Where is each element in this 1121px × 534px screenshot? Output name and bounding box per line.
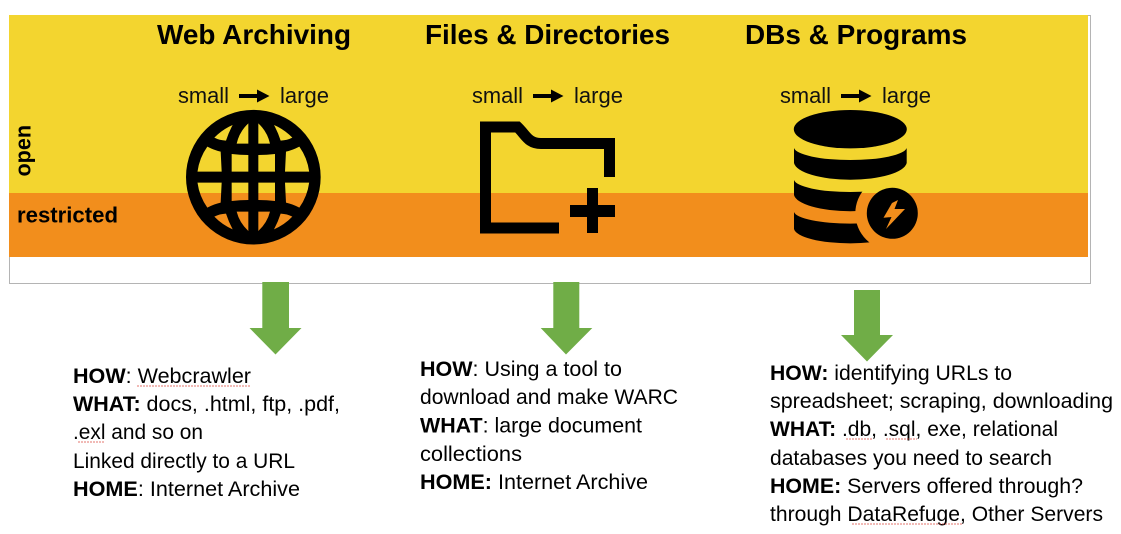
scale: small to large, databases: small xyxy=(780,83,831,108)
scale: small to large, databases xyxy=(780,83,931,108)
text block: web archiving notes: HOME: Internet Archive xyxy=(73,478,300,501)
text block: databases notes: databases you need to search xyxy=(770,447,1052,470)
text block: files notes: collections xyxy=(420,443,522,466)
text block: databases notes: spreadsheet; scraping, downloading xyxy=(770,390,1113,413)
scale: small to large, databases: large xyxy=(882,83,931,108)
text block: files notes: WHAT: large document xyxy=(420,414,642,438)
icon: folder with plus xyxy=(486,127,615,233)
text block: databases notes: WHAT: .db, .sql, exe, relational xyxy=(770,418,1058,441)
heading: Files & Directories: Files & Directories xyxy=(425,19,670,50)
scale: small to large, web: small xyxy=(178,83,229,108)
text block: files notes: download and make WARC xyxy=(420,386,678,409)
scale: small to large, web xyxy=(178,83,329,108)
text block: databases notes: HOW: identifying URLs to xyxy=(770,362,1012,385)
text block: web archiving notes: Linked directly to a URL xyxy=(73,450,295,473)
arrow: databases down xyxy=(841,290,893,362)
label: restricted: restricted xyxy=(17,202,118,228)
arrow: web archiving down xyxy=(250,282,302,354)
text block: web archiving notes: .exl and so on xyxy=(73,421,203,444)
text block: files notes xyxy=(420,358,678,494)
text block: databases notes: HOME: Servers offered through? xyxy=(770,475,1083,498)
scale: small to large, files: large xyxy=(574,83,623,108)
panel: access level bands xyxy=(9,15,1090,284)
icon: database with lightning badge xyxy=(794,110,918,243)
text block: web archiving notes: HOW: Webcrawler xyxy=(73,365,251,388)
scale: small to large, files: small xyxy=(472,83,523,108)
text block: files notes: HOME: Internet Archive xyxy=(420,471,648,494)
heading: DBs & Programs: DBs & Programs xyxy=(745,19,967,50)
scale: small to large, web: large xyxy=(280,83,329,108)
text block: web archiving notes xyxy=(73,365,340,501)
icon: globe xyxy=(186,110,321,244)
scale: small to large, files xyxy=(472,83,623,108)
text block: databases notes xyxy=(770,362,1113,526)
text block: web archiving notes: WHAT: docs, .html, ftp, .pdf, xyxy=(73,393,340,416)
arrow: files down xyxy=(541,282,592,354)
text block: databases notes: through DataRefuge, Other Servers xyxy=(770,503,1103,526)
label: open: open xyxy=(10,125,36,176)
heading: Web Archiving: Web Archiving xyxy=(157,19,351,50)
text block: files notes: HOW: Using a tool to xyxy=(420,358,622,381)
